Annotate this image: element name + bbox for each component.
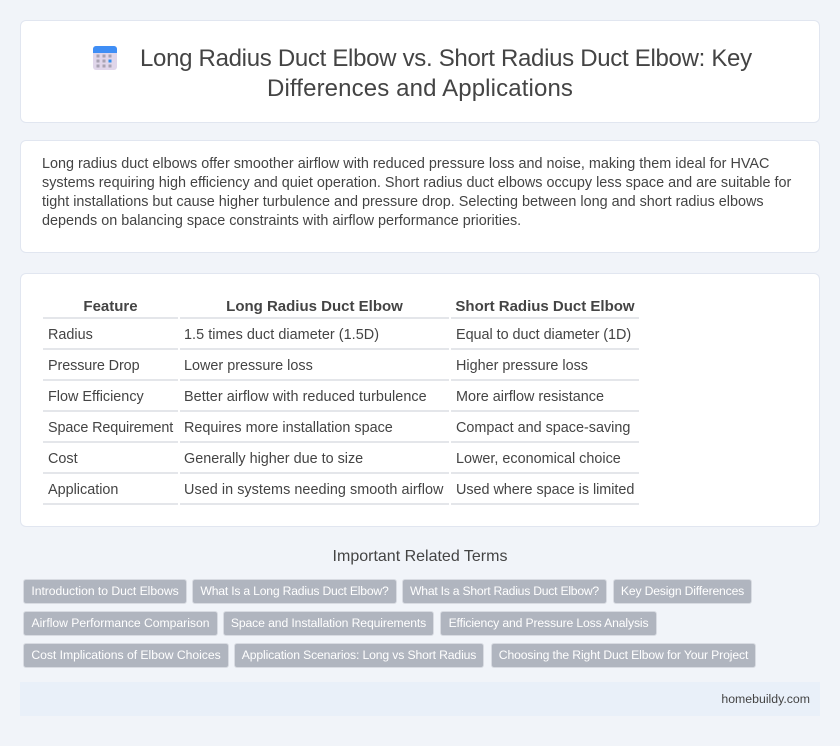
row: radius: Radius [48, 327, 93, 343]
table headers: Feature [83, 298, 138, 315]
row: cost: Cost [48, 451, 78, 467]
row: radius [48, 327, 631, 343]
related terms tags: Airflow Performance Comparison [32, 616, 209, 630]
intro text: depends on balancing space constraints with airflow performance priorities. [42, 213, 521, 229]
row: cost: Lower, economical choice [456, 451, 621, 467]
title: Differences and Applications [267, 75, 573, 102]
icon: calendar [93, 46, 117, 70]
row: pressure drop: Higher pressure loss [456, 358, 588, 374]
row: space requirement: Space Requirement [48, 420, 173, 436]
row: space requirement: Requires more installation space [184, 420, 393, 436]
row: cost: Generally higher due to size [184, 451, 363, 467]
row: pressure drop [48, 358, 588, 374]
table headers: Long Radius Duct Elbow [226, 298, 403, 315]
row: flow efficiency: Flow Efficiency [48, 389, 144, 405]
intro text [42, 156, 792, 229]
related terms tags: What Is a Long Radius Duct Elbow? [200, 584, 389, 598]
related terms tags: Key Design Differences [621, 584, 744, 598]
related terms tags: What Is a Short Radius Duct Elbow? [410, 584, 599, 598]
related terms heading: Important Related Terms [333, 548, 507, 565]
row: flow efficiency [48, 389, 604, 405]
row: space requirement: Compact and space-saving [456, 420, 630, 436]
row: radius: 1.5 times duct diameter (1.5D) [184, 327, 379, 343]
table headers [83, 298, 635, 315]
related terms tags: Cost Implications of Elbow Choices [31, 648, 221, 662]
footer site name: homebuildy.com [721, 692, 810, 706]
panel: intro paragraph [20, 140, 820, 253]
row: application: Used in systems needing smooth airflow [184, 482, 443, 498]
related terms tags: Efficiency and Pressure Loss Analysis [449, 616, 648, 630]
footer bar [20, 682, 820, 716]
related terms tags: Application Scenarios: Long vs Short Radius [242, 648, 476, 662]
table headers: Short Radius Duct Elbow [455, 298, 635, 315]
related terms tags [23, 579, 756, 668]
row: cost [48, 451, 621, 467]
row: flow efficiency: More airflow resistance [456, 389, 604, 405]
title [140, 45, 752, 102]
intro text: tight installations but cause higher turbulence and pressure drop. Selecting between long and short radius elbows [42, 194, 764, 210]
panel: comparison table [20, 273, 820, 527]
row: application: Used where space is limited [456, 482, 634, 498]
row: flow efficiency: Better airflow with reduced turbulence [184, 389, 427, 405]
row: application: Application [48, 482, 118, 498]
row: pressure drop: Pressure Drop [48, 358, 139, 374]
row: radius: Equal to duct diameter (1D) [456, 327, 631, 343]
row: pressure drop: Lower pressure loss [184, 358, 313, 374]
row: space requirement [48, 420, 630, 436]
header panel [20, 20, 820, 123]
row: application [48, 482, 634, 498]
related terms tags: Choosing the Right Duct Elbow for Your Project [499, 648, 748, 662]
intro text: systems requiring high efficiency and quiet operation. Short radius duct elbows occupy less space and are suitable for [42, 175, 791, 191]
related terms tags: Introduction to Duct Elbows [31, 584, 179, 598]
related terms tags: Space and Installation Requirements [231, 616, 426, 630]
intro text: Long radius duct elbows offer smoother airflow with reduced pressure loss and noise, making them ideal for HVAC [42, 156, 769, 172]
title: Long Radius Duct Elbow vs. Short Radius Duct Elbow: Key [140, 45, 752, 72]
